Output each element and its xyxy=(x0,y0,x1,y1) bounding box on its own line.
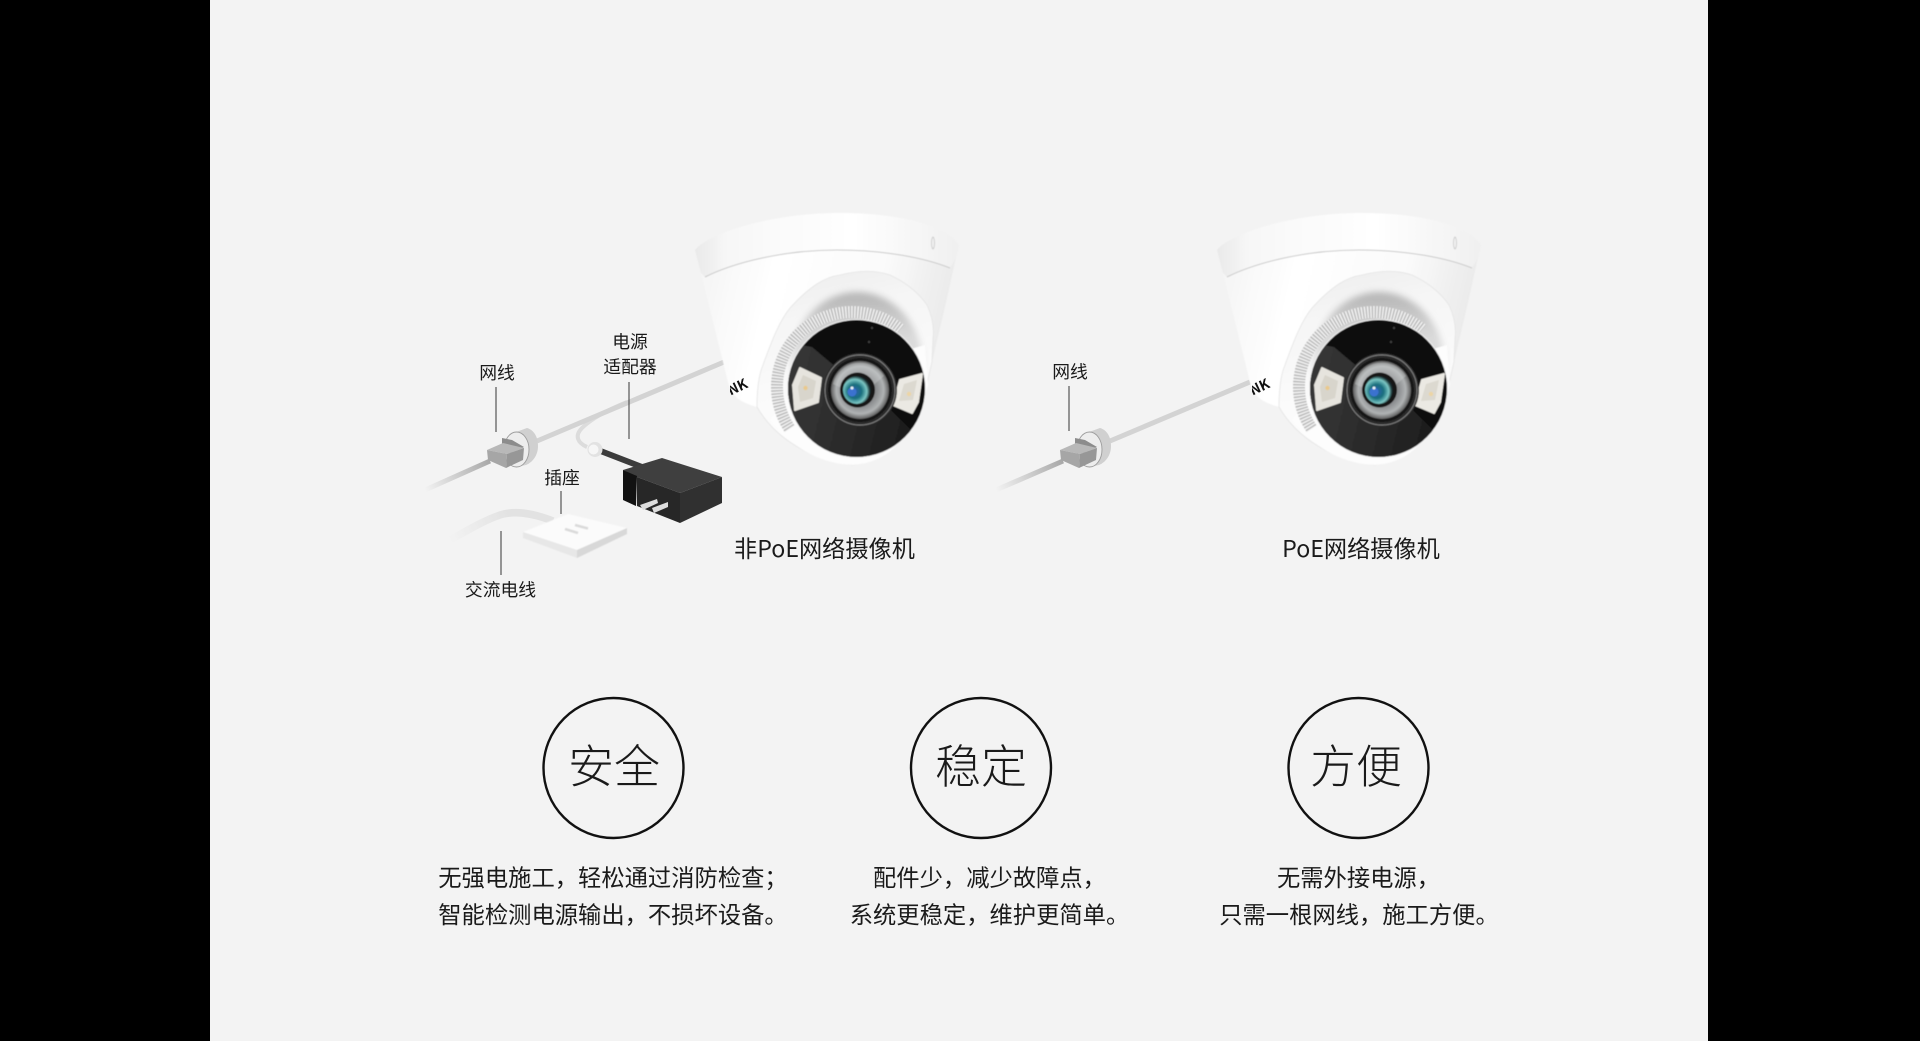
panel: non-PoE camera wiring diagram xyxy=(425,213,959,602)
network cable to camera xyxy=(1110,382,1250,441)
panel: stability xyxy=(850,698,1129,930)
heading: non-PoE camera: 非PoE网络摄像机 xyxy=(734,530,915,564)
badge: safety xyxy=(544,698,684,838)
camera logo fragment: NK xyxy=(1246,373,1273,400)
text: convenience description: 无需外接电源， xyxy=(1277,859,1440,893)
text: safety description xyxy=(438,859,788,930)
icon: network connector xyxy=(487,428,538,468)
label: socket: 插座 xyxy=(544,464,580,490)
heading: PoE camera: PoE网络摄像机 xyxy=(1282,530,1440,564)
text: convenience description xyxy=(1219,859,1499,930)
AC power line xyxy=(450,513,553,540)
leader line: AC line xyxy=(500,531,502,575)
camera logo fragment: NK xyxy=(724,373,751,400)
badge: safety: 安全 xyxy=(568,731,660,797)
panel: PoE camera wiring diagram xyxy=(996,213,1481,564)
text: convenience description: 只需一根网线，施工方便。 xyxy=(1219,896,1499,930)
badge: convenience xyxy=(1288,698,1428,838)
panel: convenience xyxy=(1219,698,1499,930)
power adapter branch cable xyxy=(578,402,627,447)
label: AC power line: 交流电线 xyxy=(465,576,536,602)
background panel xyxy=(210,0,1708,1041)
icon: wall socket xyxy=(523,514,627,558)
badge: stability xyxy=(911,698,1051,838)
network cable tail xyxy=(425,461,490,490)
leader line: adapter xyxy=(628,382,630,439)
leader line: network cable xyxy=(495,387,497,432)
text: stability description: 系统更稳定，维护更简单。 xyxy=(850,896,1129,930)
icon: first camera xyxy=(695,213,959,470)
badge: convenience: 方便 xyxy=(1310,731,1402,797)
network cable tail xyxy=(996,461,1063,490)
leader line: socket xyxy=(560,491,562,514)
icon: second camera xyxy=(1217,213,1481,470)
icon: power adapter xyxy=(588,442,722,523)
label: network cable: 网线 xyxy=(479,359,515,385)
text: safety description: 无强电施工，轻松通过消防检查； xyxy=(438,859,788,893)
icon: network connector xyxy=(1060,428,1111,468)
label: network cable: 网线 xyxy=(1052,358,1088,384)
badge: stability: 稳定 xyxy=(935,731,1027,797)
label: adapter: 适配器 xyxy=(603,353,657,379)
leader line: network cable xyxy=(1068,386,1070,431)
text: stability description: 配件少，减少故障点， xyxy=(873,859,1106,893)
panel: safety xyxy=(438,698,788,930)
label: power: 电源 xyxy=(612,328,648,354)
text: stability description xyxy=(850,859,1129,930)
network cable to camera xyxy=(537,362,724,441)
text: safety description: 智能检测电源输出，不损坏设备。 xyxy=(438,896,788,930)
